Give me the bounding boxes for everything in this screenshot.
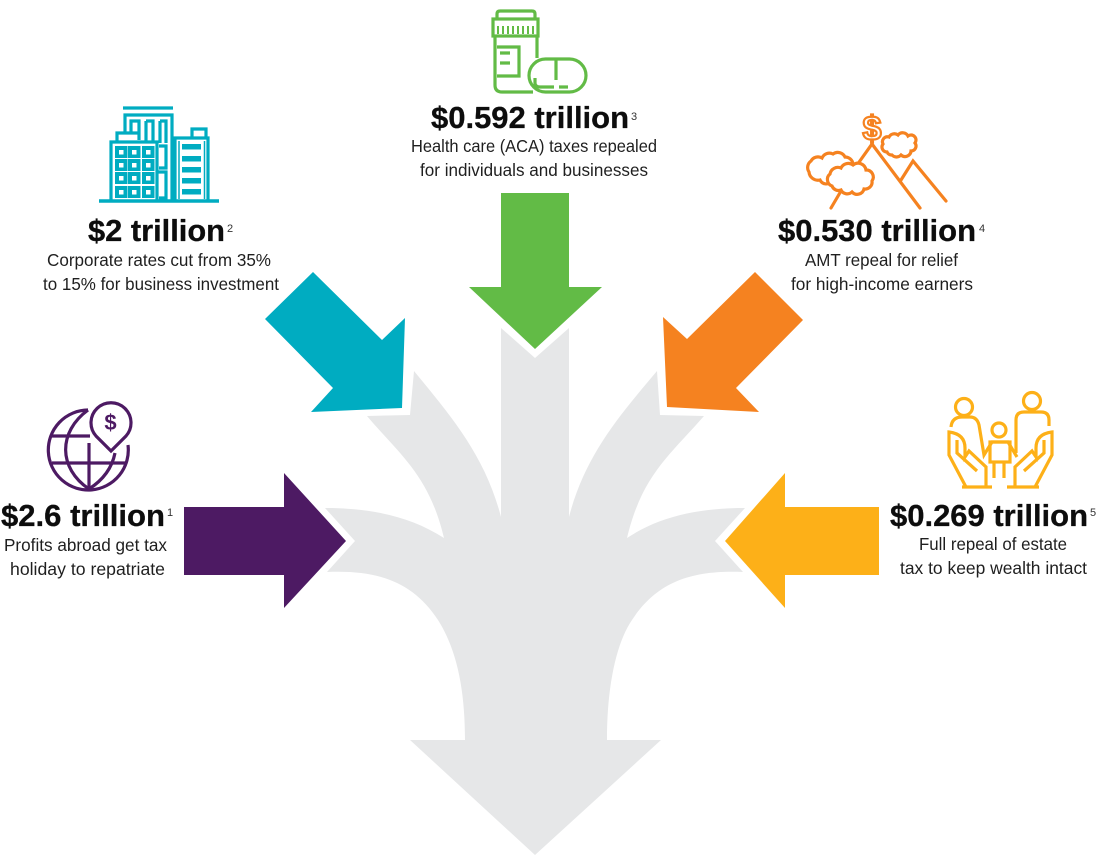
heading: $2 trillion: $2 trillion [88, 213, 225, 248]
arrow: orange [663, 272, 803, 412]
icon: mountain with dollar sign and clouds: $ [863, 110, 882, 148]
footnote marker 1: 1 [167, 507, 173, 519]
text: health care [411, 136, 657, 180]
text: AMT repeal: for high-income earners [791, 274, 973, 294]
footnote marker 4: 4 [979, 223, 985, 235]
icon: pill bottle and capsule [493, 11, 586, 92]
icon: family in caring hands [949, 392, 1052, 487]
footnote marker 3: 3 [631, 111, 637, 123]
arrow: purple [184, 473, 346, 608]
heading: $0.592 trillion: $0.592 trillion [431, 100, 629, 135]
text: estate tax: tax to keep wealth intact [900, 558, 1087, 578]
text: corporate rates: Corporate rates cut from 35% [47, 250, 271, 270]
icon: mountain with dollar sign and clouds [808, 110, 946, 208]
footnote marker 5: 5 [1090, 507, 1096, 519]
text: health care: Health care (ACA) taxes repealed [411, 136, 657, 156]
heading: $2.6 trillion: $2.6 trillion [1, 498, 165, 533]
icon: globe with dollar pin: $ [104, 410, 117, 435]
text: profits abroad [4, 535, 167, 579]
arrow: yellow [725, 473, 879, 608]
arrow: green [469, 193, 602, 349]
footnote marker 2: 2 [227, 223, 233, 235]
large gray converging arrow [325, 328, 745, 855]
heading: $0.530 trillion: $0.530 trillion [778, 213, 976, 248]
text: estate tax: Full repeal of estate [919, 534, 1067, 554]
text: corporate rates [43, 250, 279, 294]
icon: office buildings [99, 108, 219, 201]
heading: $0.269 trillion: $0.269 trillion [890, 498, 1088, 533]
text: AMT repeal [791, 250, 973, 294]
text: AMT repeal: AMT repeal for relief [805, 250, 958, 270]
text: estate tax [900, 534, 1087, 578]
text: corporate rates: to 15% for business investment [43, 274, 279, 294]
icon: globe with dollar pin [48, 403, 131, 490]
text: profits abroad: Profits abroad get tax [4, 535, 167, 555]
text: profits abroad: holiday to repatriate [10, 559, 165, 579]
text: health care: for individuals and businesses [420, 160, 648, 180]
arrow: teal [265, 272, 405, 412]
